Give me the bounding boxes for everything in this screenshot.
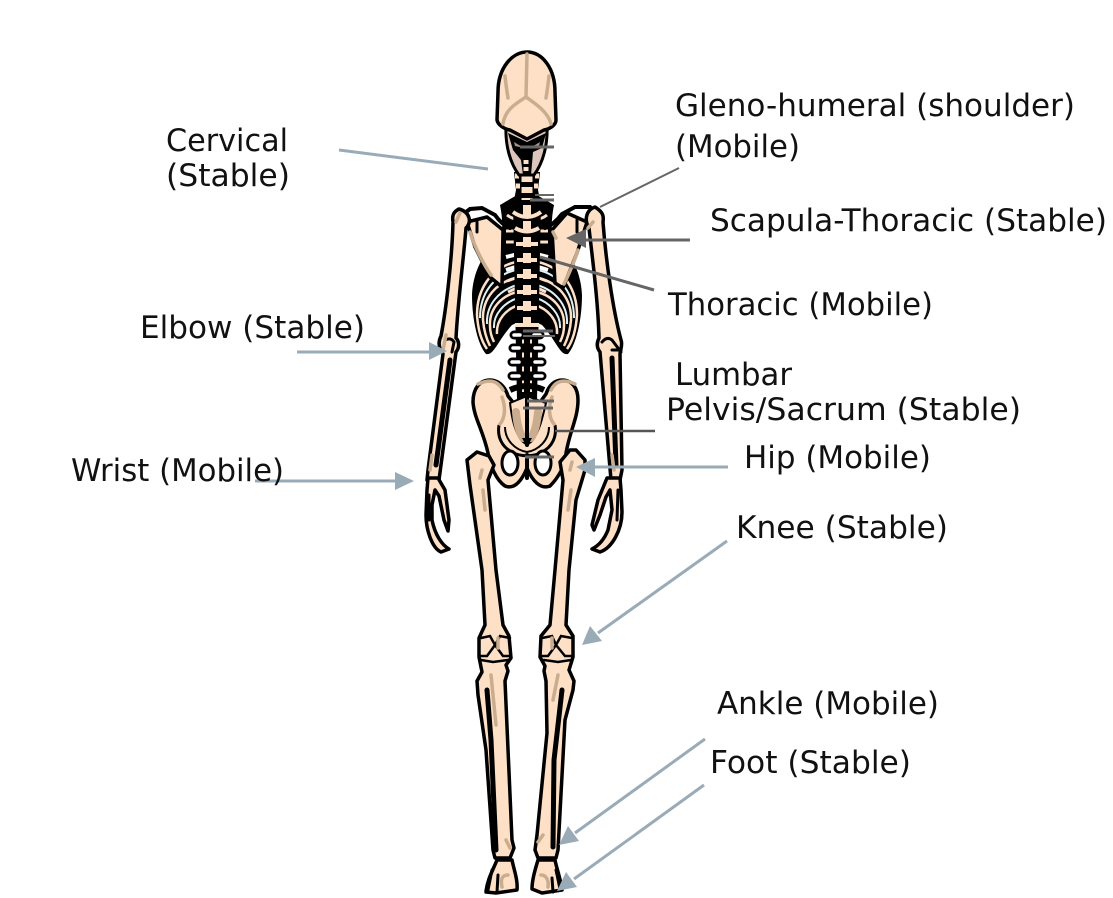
right arm: [586, 207, 622, 552]
right scapula and clavicle: [545, 207, 597, 288]
label: ankle: Ankle (Mobile): [717, 686, 939, 722]
label: elbow: Elbow (Stable): [140, 310, 365, 346]
left leg: [467, 452, 517, 893]
rib cage: [472, 190, 582, 354]
arrow: gleno-humeral: [600, 168, 679, 207]
label: foot: Foot (Stable): [710, 745, 911, 781]
label: lumbar: Lumbar: [675, 357, 792, 393]
right leg: [532, 450, 585, 893]
label: gleno-humeral: [675, 88, 1075, 165]
label: wrist: Wrist (Mobile): [71, 453, 284, 489]
label: knee: Knee (Stable): [736, 510, 948, 546]
short pointer lines on the spine: [520, 147, 555, 457]
label: pelvis/sacrum: Pelvis/Sacrum (Stable): [666, 392, 1021, 428]
label: cervical: Cervical: [166, 123, 288, 159]
skeleton illustration: [426, 52, 622, 893]
pelvis: [473, 380, 578, 487]
label: gleno-humeral: (Mobile): [675, 129, 800, 165]
left arm: [426, 209, 469, 552]
label: hip: Hip (Mobile): [744, 440, 931, 476]
arrow: foot: [557, 785, 704, 891]
label: thoracic: Thoracic (Mobile): [667, 287, 933, 323]
arrow: knee: [582, 541, 727, 645]
left scapula and clavicle: [457, 208, 510, 287]
arrow: thoracic: [540, 257, 654, 290]
arrow: pelvis/sacrum: [555, 430, 655, 432]
arrow: elbow: [297, 342, 447, 360]
label: scapula-thoracic: Scapula-Thoracic (Stable): [710, 203, 1107, 239]
arrow: hip: [576, 458, 728, 477]
spine: [510, 172, 544, 400]
label: cervical: [166, 123, 290, 194]
arrow: scapula-thoracic: [566, 229, 690, 248]
label: gleno-humeral: Gleno-humeral (shoulder): [675, 88, 1075, 124]
skull: [497, 52, 556, 175]
arrow: ankle: [559, 739, 705, 845]
label: cervical: (Stable): [166, 158, 290, 194]
arrow: wrist: [255, 472, 414, 490]
arrow: cervical: [339, 150, 488, 169]
